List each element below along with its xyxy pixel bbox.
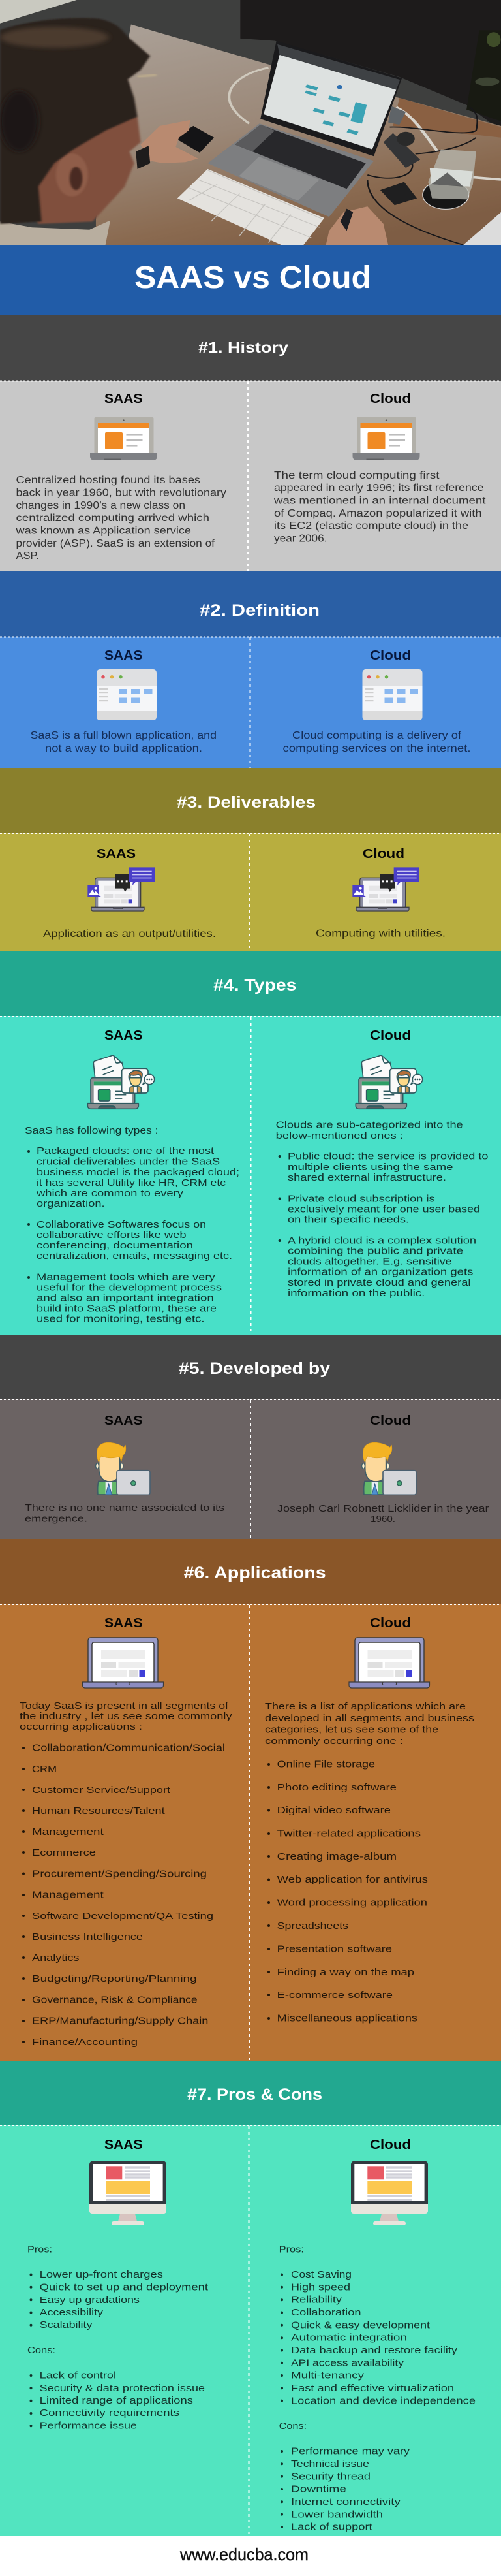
text: SAAS types list: crucial deliverables under the SaaS: [37, 1157, 220, 1168]
text: Cloud pros and cons: Automatic integration: [291, 2333, 407, 2344]
text: Cloud types list: below-mentioned ones :: [276, 1131, 403, 1141]
icon: orange laptop (SAAS): [90, 417, 157, 460]
text: SAAS pros and cons: Pros:: [27, 2245, 52, 2255]
text: SAAS history: back in year 1960, but with revolutionary: [16, 487, 226, 499]
text: SAAS applications list: Budgeting/Reporting/Planning: [32, 1974, 197, 1984]
text: Cloud pros and cons: Data backup and restore facility: [291, 2345, 458, 2356]
text: Cloud pros and cons: Security thread: [291, 2472, 371, 2482]
icon: orange laptop (Cloud): [352, 417, 420, 460]
text: SAAS types list: useful for the development process: [37, 1283, 222, 1294]
section header: #4. Types: [0, 951, 501, 1017]
heading: Cloud: Cloud: [370, 2138, 411, 2152]
text: SAAS applications list: Finance/Accounting: [32, 2037, 138, 2048]
text: SAAS developer: [25, 1503, 224, 1525]
text: Cloud history: [273, 470, 486, 545]
heading: Cloud: Cloud: [370, 1028, 411, 1043]
text: Cloud pros and cons: Collaboration: [291, 2308, 361, 2318]
text: SAAS pros and cons: Lack of control: [40, 2370, 116, 2381]
text: Cloud applications list: Twitter-related applications: [277, 1829, 421, 1839]
icon: person with laptop (Cloud): [362, 1442, 416, 1495]
text: SAAS types list: collaborative efforts like web: [37, 1230, 187, 1241]
text: SAAS applications list: occurring applications :: [20, 1722, 142, 1732]
text: Cloud pros and cons: API access availability: [291, 2358, 404, 2368]
text: Cloud types list: Public cloud: the service is provided to: [288, 1152, 488, 1162]
text: Cloud pros and cons: [279, 2245, 476, 2533]
text: Cloud pros and cons: Fast and effective virtualization: [291, 2383, 454, 2394]
section header: #6. Applications: #6. Applications: [184, 1564, 326, 1582]
text: SAAS types list: build into SaaS platform, these are: [37, 1304, 217, 1314]
photo: man working at a laptop on a wooden desk: [0, 0, 501, 245]
text: Cloud pros and cons: Internet connectivity: [291, 2497, 401, 2507]
text: SAAS applications list: CRM: [32, 1764, 57, 1775]
text: SAAS applications list: the industry , let us see some commonly: [20, 1711, 232, 1722]
text: Cloud definition: Cloud computing is a delivery of: [292, 730, 462, 741]
panel: definition comparison: [0, 637, 501, 768]
text: SAAS pros and cons: [27, 2245, 208, 2432]
text: Cloud applications list: categories, let us see some of the: [265, 1725, 438, 1736]
section header: #1. History: [0, 315, 501, 381]
text: SAAS pros and cons: Quick to set up and deployment: [40, 2282, 208, 2293]
text: Cloud definition: computing services on the internet.: [283, 743, 471, 754]
text: Cloud pros and cons: Quick & easy development: [291, 2320, 430, 2330]
text: Cloud pros and cons: Pros:: [279, 2245, 304, 2255]
text: SAAS definition: not a way to build application.: [45, 743, 202, 754]
text: SAAS applications list: Business Intelligence: [32, 1932, 143, 1943]
section header: #3. Deliverables: #3. Deliverables: [177, 793, 316, 812]
text: Cloud applications list: Online File storage: [277, 1760, 375, 1770]
icon: laptop with chat bubbles (SAAS): [87, 867, 155, 911]
text: SAAS applications list: Management: [32, 1890, 104, 1901]
section header: #6. Applications: [0, 1539, 501, 1604]
icon: laptop, document and person (Cloud): [356, 1055, 423, 1109]
heading: SAAS: SAAS: [104, 1028, 142, 1043]
text: Cloud pros and cons: Cons:: [279, 2421, 307, 2432]
text: SAAS deliverable: Application as an output/utilities.: [43, 929, 216, 940]
text: Cloud types list: clouds altogether. E.g. sensitive: [288, 1257, 452, 1267]
heading: SAAS: SAAS: [104, 2138, 142, 2152]
footer: website address: www.educba.com: [179, 2545, 309, 2564]
text: SAAS pros and cons: Easy up gradations: [40, 2295, 140, 2306]
text: Cloud history: appeared in early 1996; its first reference: [274, 483, 484, 494]
text: SAAS pros and cons: Cons:: [27, 2345, 55, 2356]
heading: Cloud: Cloud: [370, 392, 411, 406]
text: Cloud applications list: Presentation software: [277, 1945, 392, 1955]
text: SAAS types list: SaaS has following types :: [25, 1126, 158, 1136]
text: Cloud pros and cons: Downtime: [291, 2485, 346, 2495]
section header: #5. Developed by: [0, 1335, 501, 1399]
heading: Cloud: Cloud: [370, 1414, 411, 1428]
text: Cloud history: of Compaq. Amazon popularized it with: [274, 508, 482, 519]
text: SAAS applications list: Human Resources/Talent: [32, 1806, 165, 1817]
icon: desktop monitor (SAAS): [89, 2161, 166, 2225]
text: SAAS applications list: Collaboration/Communication/Social: [32, 1743, 225, 1754]
heading: SAAS: SAAS: [104, 392, 142, 406]
panel: applications comparison: [0, 1604, 501, 2061]
text: Cloud pros and cons: Cost Saving: [291, 2270, 352, 2280]
text: SAAS pros and cons: Accessibility: [40, 2308, 104, 2318]
text: Cloud applications list: E-commerce software: [277, 1990, 393, 2001]
panel: types comparison: [0, 1016, 501, 1335]
text: Cloud pros and cons: Multi-tenancy: [291, 2371, 365, 2381]
text: SAAS history: [15, 475, 226, 562]
icon: open laptop (Cloud): [349, 1638, 429, 1688]
text: SAAS types list: and also an important integration: [37, 1294, 214, 1304]
heading: Cloud: Cloud: [370, 1616, 411, 1630]
text: Cloud types list: Clouds are sub-categorized into the: [276, 1121, 463, 1131]
text: SAAS applications list: Today SaaS is present in all segments of: [20, 1701, 229, 1711]
text: Cloud history: year 2006.: [274, 533, 327, 545]
text: SAAS applications list: ERP/Manufacturing/Supply Chain: [32, 2016, 208, 2027]
text: Cloud history: The term cloud computing first: [274, 470, 440, 481]
text: SAAS pros and cons: Security & data protection issue: [40, 2383, 205, 2394]
text: Cloud types list: information of an organization gets: [288, 1267, 473, 1278]
text: Cloud applications list: Miscellaneous applications: [277, 2014, 418, 2024]
text: Cloud applications list: Word processing application: [277, 1898, 427, 1909]
text: SAAS history: ASP.: [16, 550, 39, 562]
text: Cloud pros and cons: Lack of support: [291, 2522, 372, 2533]
section header: #5. Developed by: #5. Developed by: [179, 1360, 330, 1378]
text: SAAS developer: emergence.: [25, 1514, 87, 1525]
text: Cloud types list: A hybrid cloud is a complex solution: [288, 1236, 476, 1247]
title banner: [0, 245, 501, 315]
text: SAAS applications list: Ecommerce: [32, 1848, 96, 1858]
text: Cloud types list: [276, 1121, 488, 1299]
section header: #1. History: #1. History: [198, 339, 288, 356]
panel: developed by comparison: [0, 1399, 501, 1539]
text: SAAS definition: [30, 730, 217, 754]
text: Cloud pros and cons: Technical issue: [291, 2459, 369, 2470]
heading: SAAS: SAAS: [104, 648, 142, 663]
text: SAAS types list: conferencing, documentation: [37, 1241, 193, 1251]
heading: SAAS: SAAS: [97, 847, 136, 861]
text: Cloud types list: stored in private cloud and general: [288, 1278, 471, 1288]
text: SAAS developer: There is no one name associated to its: [25, 1503, 224, 1514]
text: Cloud pros and cons: High speed: [291, 2282, 350, 2293]
text: SAAS applications list: [20, 1701, 232, 2048]
text: Cloud types list: information on the public.: [288, 1288, 425, 1299]
icon: browser window (Cloud): [363, 669, 423, 720]
footer: website address: [0, 2536, 501, 2576]
text: SAAS types list: used for monitoring, testing etc.: [37, 1314, 205, 1325]
heading: Cloud: Cloud: [363, 847, 404, 861]
text: Cloud pros and cons: Performance may vary: [291, 2447, 410, 2457]
text: SAAS pros and cons: Scalability: [40, 2320, 93, 2330]
text: SAAS types list: Collaborative Softwares focus on: [37, 1220, 206, 1230]
title: SAAS vs Cloud: [134, 261, 371, 295]
text: Cloud applications list: commonly occurring one :: [265, 1736, 403, 1747]
text: SAAS types list: [25, 1126, 239, 1325]
heading: SAAS: SAAS: [104, 1616, 142, 1630]
text: SAAS history: provider (ASP). SaaS is an extension of: [16, 538, 215, 549]
text: Cloud applications list: Digital video software: [277, 1805, 391, 1816]
text: SAAS definition: SaaS is a full blown application, and: [30, 730, 217, 741]
text: Cloud pros and cons: Location and device independence: [291, 2396, 476, 2406]
icon: desktop monitor (Cloud): [351, 2161, 428, 2225]
text: SAAS applications list: Customer Service/Support: [32, 1785, 170, 1796]
icon: laptop with chat bubbles (Cloud): [352, 867, 419, 911]
text: SAAS history: centralized computing arrived which: [16, 513, 209, 524]
text: SAAS types list: business model is the packaged cloud;: [37, 1168, 239, 1178]
text: SAAS history: was known as Application service: [15, 525, 191, 537]
text: Cloud applications list: Photo editing software: [277, 1783, 397, 1793]
text: Cloud definition: [283, 730, 471, 754]
text: Cloud types list: exclusively meant for one user based: [288, 1204, 480, 1215]
icon: browser window (SAAS): [97, 669, 157, 720]
text: Cloud deliverable: Computing with utilities.: [316, 929, 446, 940]
section header: #2. Definition: [0, 571, 501, 637]
text: Cloud applications list: Spreadsheets: [277, 1921, 348, 1932]
text: Cloud developer: [277, 1504, 489, 1525]
section header: #3. Deliverables: [0, 768, 501, 833]
text: SAAS types list: which are common to every: [36, 1188, 184, 1199]
icon: laptop, document and person (SAAS): [87, 1055, 155, 1109]
text: SAAS applications list: Management: [32, 1827, 104, 1837]
text: SAAS pros and cons: Performance issue: [40, 2421, 137, 2432]
text: Cloud developer: Joseph Carl Robnett Licklider in the year: [277, 1504, 489, 1514]
text: Cloud types list: multiple clients using the same: [288, 1162, 453, 1173]
text: SAAS history: Centralized hosting found its bases: [16, 475, 200, 486]
panel: pros and cons comparison: [0, 2125, 501, 2536]
text: Cloud pros and cons: Reliability: [291, 2295, 342, 2306]
panel: deliverables comparison: [0, 833, 501, 951]
section header: #7. Pros & Cons: #7. Pros & Cons: [187, 2086, 322, 2104]
icon: open laptop (SAAS): [82, 1638, 163, 1688]
text: SAAS pros and cons: Connectivity requirements: [40, 2408, 179, 2419]
heading: SAAS: SAAS: [104, 1414, 142, 1428]
text: Cloud applications list: There is a list of applications which are: [265, 1702, 466, 1712]
text: Cloud types list: combining the public and private: [288, 1247, 463, 1257]
text: Cloud types list: on their specific needs.: [288, 1215, 409, 1225]
text: SAAS applications list: Analytics: [32, 1953, 80, 1964]
text: Cloud developer: 1960.: [371, 1514, 395, 1525]
text: SAAS applications list: Software Development/QA Testing: [32, 1911, 213, 1922]
text: Cloud applications list: Creating image-album: [277, 1852, 397, 1862]
section header: #2. Definition: #2. Definition: [200, 601, 320, 620]
text: SAAS pros and cons: Lower up-front charges: [40, 2270, 163, 2280]
icon: person with laptop (SAAS): [96, 1442, 150, 1495]
text: SAAS types list: centralization, emails, messaging etc.: [37, 1251, 232, 1262]
text: SAAS applications list: Governance, Risk & Compliance: [32, 1996, 198, 2006]
panel: history comparison: [0, 381, 501, 571]
text: SAAS types list: Packaged clouds: one of the most: [37, 1146, 214, 1156]
text: Cloud pros and cons: Lower bandwidth: [291, 2509, 383, 2520]
text: Cloud applications list: Web application for antivirus: [277, 1875, 428, 1885]
text: Cloud applications list: Finding a way on the map: [277, 1967, 414, 1978]
text: Cloud types list: Private cloud subscription is: [288, 1194, 435, 1204]
text: Cloud history: was mentioned in an internal document: [273, 495, 486, 507]
text: SAAS types list: Management tools which are very: [37, 1273, 215, 1283]
text: Cloud history: its EC2 (elastic compute cloud) in the: [274, 520, 468, 532]
text: SAAS pros and cons: Limited range of applications: [40, 2396, 193, 2406]
section header: #7. Pros & Cons: [0, 2061, 501, 2125]
text: SAAS types list: organization.: [37, 1199, 105, 1209]
text: Cloud applications list: [265, 1702, 474, 2024]
text: SAAS history: changes in 1990’s a new class on: [16, 500, 185, 511]
text: Cloud types list: shared external infrastructure.: [288, 1173, 446, 1183]
heading: Cloud: Cloud: [370, 648, 411, 663]
section header: #4. Types: #4. Types: [213, 976, 296, 994]
text: Cloud applications list: developed in all segments and business: [265, 1713, 474, 1724]
text: SAAS types list: it has several Utility like HR, CRM etc: [37, 1178, 226, 1188]
text: SAAS applications list: Procurement/Spending/Sourcing: [32, 1869, 207, 1880]
